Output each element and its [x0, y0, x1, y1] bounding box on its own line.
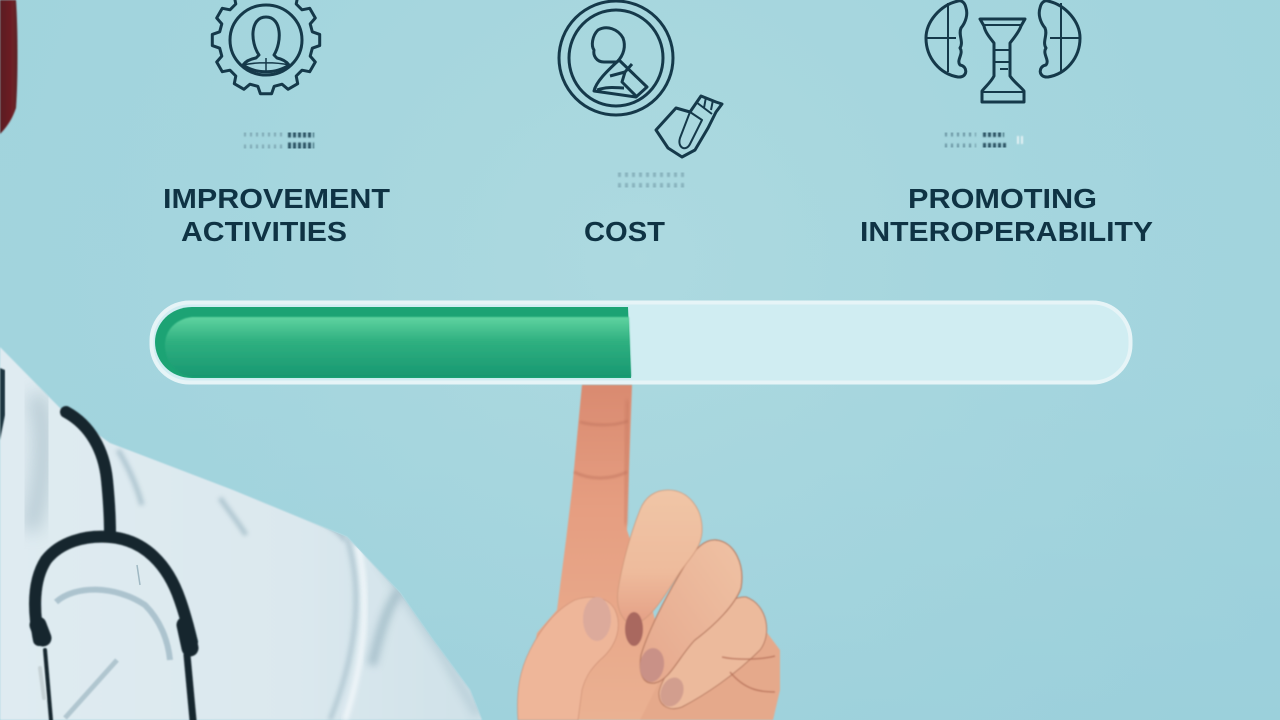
pinky crease [722, 656, 775, 692]
stethoscope [35, 412, 193, 720]
ring finger [640, 540, 742, 683]
index shading [625, 400, 628, 525]
thumb nail [583, 597, 611, 641]
smudged caption: improvement activities [244, 134, 314, 147]
palm and index finger [520, 385, 680, 720]
pinky nail [656, 674, 688, 710]
smudged caption: promoting interoperability [945, 134, 1024, 146]
collar shadow [0, 368, 5, 440]
white coat [0, 347, 482, 720]
pinky finger [659, 597, 767, 709]
middle finger nail [625, 612, 643, 646]
icon: test tube in hand [656, 96, 722, 157]
palm and pinky base [640, 610, 780, 720]
label: improvement activities: ACTIVITIES [181, 216, 347, 247]
label: promoting interoperability: INTEROPERABILITY [860, 216, 1153, 247]
doctor's face edge [0, 0, 18, 134]
ring finger nail [638, 646, 666, 684]
label: promoting interoperability [860, 183, 1153, 247]
thumb [518, 597, 618, 720]
icon: gear with person [212, 0, 320, 94]
doctor in white coat with stethoscope [0, 347, 482, 720]
label: improvement activities [163, 183, 390, 247]
icon: circle with anatomical figure [559, 1, 673, 115]
bar track [152, 302, 1130, 382]
label: cost: COST [584, 216, 665, 247]
finger creases [574, 421, 628, 478]
label: promoting interoperability: PROMOTING [908, 183, 1097, 214]
middle finger [618, 490, 702, 625]
smudged caption: cost [618, 174, 688, 186]
label: improvement activities: IMPROVEMENT [163, 183, 390, 214]
progress bar [152, 302, 1130, 382]
hand pointing up [518, 385, 780, 720]
icon: kidneys and hourglass [926, 1, 1080, 102]
bar fill 50 percent [155, 307, 631, 378]
